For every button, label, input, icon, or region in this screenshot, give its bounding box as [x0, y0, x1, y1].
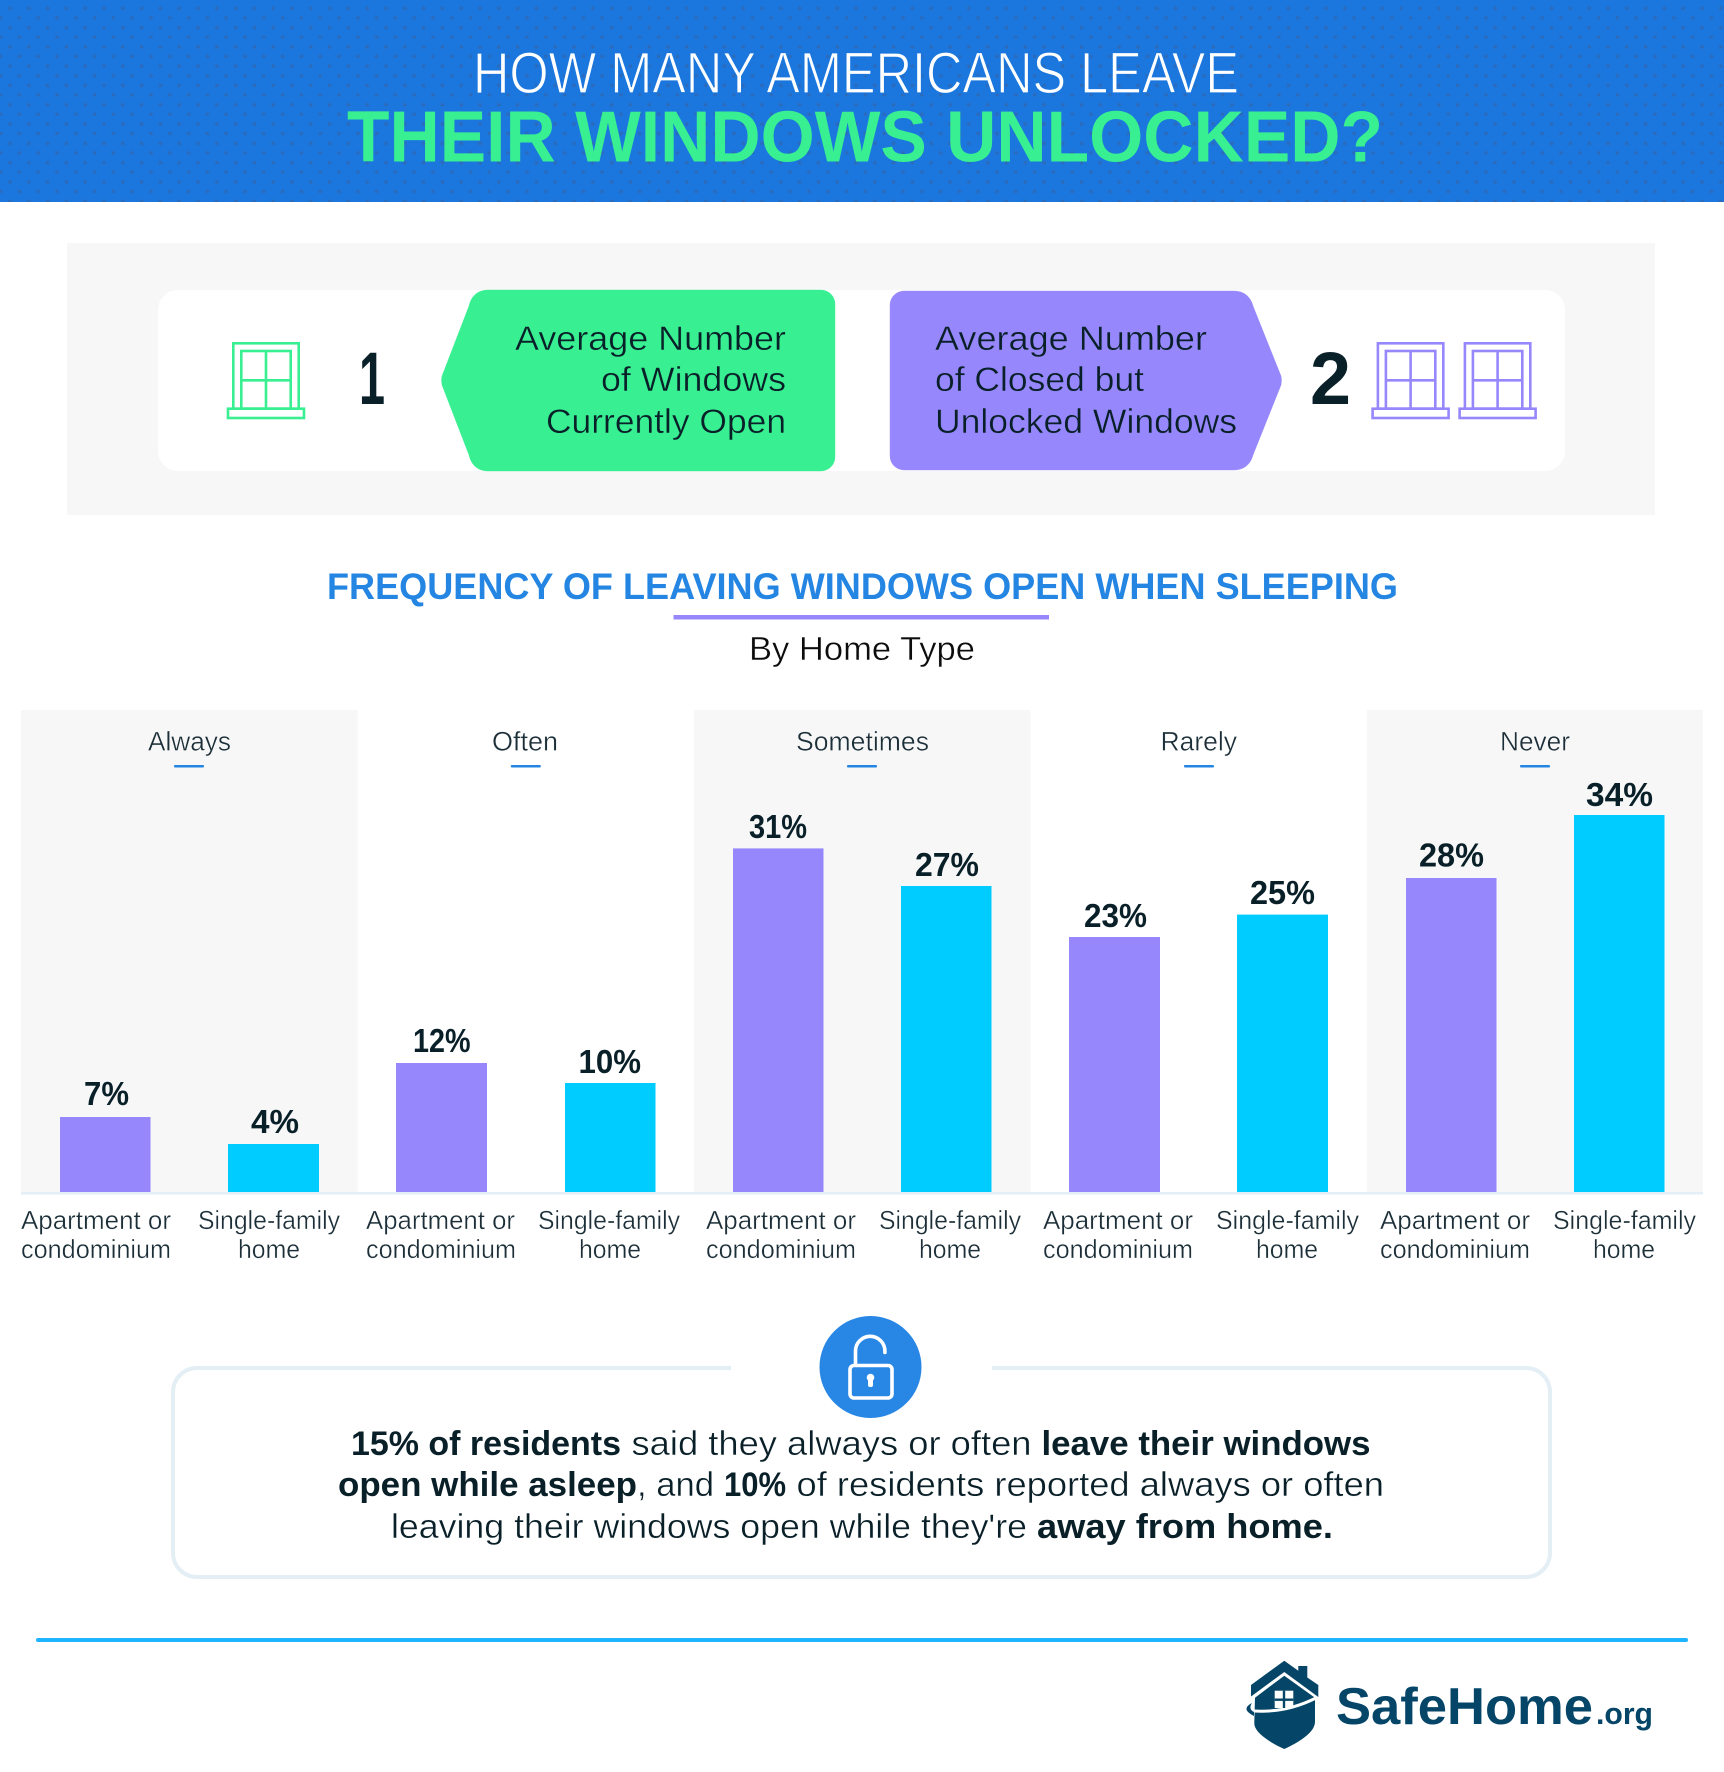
column: always: Always	[148, 726, 231, 756]
column: often: 12%	[413, 1022, 470, 1059]
axis labels: Apartment or	[1380, 1205, 1530, 1235]
callout: average closed but unlocked windows	[890, 291, 1282, 470]
logo: SafeHome.org	[1246, 1661, 1653, 1749]
axis labels: Apartment or	[706, 1205, 856, 1235]
axis labels: condominium	[21, 1234, 171, 1264]
axis labels: Single-family	[1553, 1205, 1696, 1235]
column: rarely: Rarely	[1160, 726, 1237, 756]
header banner	[0, 0, 1724, 202]
axis labels: condominium	[1380, 1234, 1530, 1264]
logo wordmark: SafeHome	[1336, 1678, 1593, 1736]
chart subheading: By Home Type	[749, 630, 975, 667]
axis labels: home	[579, 1234, 641, 1264]
axis labels: Single-family	[538, 1205, 680, 1235]
axis labels: home	[238, 1234, 300, 1264]
number: two unlocked windows: 2	[1310, 337, 1351, 420]
axis labels: Single-family	[198, 1205, 340, 1235]
column: never: 34%	[1586, 776, 1653, 813]
column: always: 7%	[84, 1075, 129, 1112]
column: rarely: 25%	[1250, 874, 1315, 911]
axis labels: Apartment or	[366, 1205, 515, 1235]
logo: SafeHome.org: .org	[1596, 1696, 1653, 1731]
panel: window averages	[67, 243, 1655, 515]
axis labels: Single-family	[1216, 1205, 1359, 1235]
title line 2: THEIR WINDOWS UNLOCKED?	[347, 98, 1383, 178]
icon: open padlock	[820, 1316, 922, 1418]
axis labels: home	[1256, 1234, 1318, 1264]
callout: average open windows: Average Number	[515, 320, 786, 358]
summary text: leaving their windows open while they're	[391, 1508, 1027, 1546]
chart heading	[327, 565, 1398, 667]
bar chart: frequency by home type	[21, 710, 1703, 1264]
column: sometimes: 27%	[915, 846, 979, 883]
axis labels: condominium	[706, 1234, 856, 1264]
column: often: Often	[492, 726, 558, 756]
column: always	[21, 710, 358, 1192]
column: sometimes: 31%	[749, 808, 807, 845]
summary text	[338, 1425, 1384, 1546]
column: never: 28%	[1419, 836, 1484, 874]
chart heading: FREQUENCY OF LEAVING WINDOWS OPEN WHEN SLEEPING	[327, 565, 1398, 607]
callout: average closed but unlocked windows: of Closed but	[935, 361, 1145, 399]
summary text: away from home.	[1037, 1508, 1333, 1546]
axis labels: condominium	[1043, 1234, 1193, 1264]
axis labels	[21, 1205, 1696, 1264]
callout: average open windows	[442, 290, 835, 471]
axis labels: home	[1593, 1234, 1655, 1264]
title line 1: HOW MANY AMERICANS LEAVE	[473, 41, 1239, 106]
column: never: Never	[1500, 726, 1570, 756]
callout panel: summary	[173, 1316, 1550, 1577]
summary text: 15% of residents	[351, 1425, 621, 1463]
column: always: 4%	[251, 1103, 299, 1140]
axis labels: condominium	[366, 1234, 516, 1264]
callout: average open windows: of Windows	[601, 361, 786, 399]
axis labels: Apartment or	[21, 1205, 171, 1235]
column: rarely	[1069, 726, 1328, 1192]
icon: open window	[228, 343, 304, 418]
axis labels: Single-family	[879, 1205, 1021, 1235]
column: sometimes	[694, 710, 1031, 1192]
summary text: open while asleep	[338, 1466, 637, 1504]
summary text: 10%	[724, 1466, 786, 1504]
summary text: , and	[637, 1466, 714, 1504]
callout: average closed but unlocked windows: Unlocked Windows	[935, 403, 1237, 441]
column: often: 10%	[578, 1043, 641, 1080]
column: sometimes: Sometimes	[796, 726, 929, 756]
column: rarely: 23%	[1084, 897, 1147, 934]
icon: unlocked window two	[1460, 343, 1536, 418]
number: one open window: 1	[359, 337, 385, 420]
summary text: said they always or often	[632, 1425, 1032, 1463]
callout: average closed but unlocked windows: Average Number	[935, 320, 1207, 358]
icon: house shield	[1246, 1661, 1318, 1749]
callout: average open windows: Currently Open	[546, 403, 786, 441]
summary text: of residents reported always or often	[796, 1466, 1384, 1504]
column: never	[1367, 710, 1703, 1192]
axis labels: Apartment or	[1043, 1205, 1193, 1235]
axis labels: home	[919, 1234, 981, 1264]
column: often	[396, 726, 656, 1192]
icon: unlocked window one	[1373, 343, 1449, 418]
summary text: leave their windows	[1042, 1425, 1370, 1463]
